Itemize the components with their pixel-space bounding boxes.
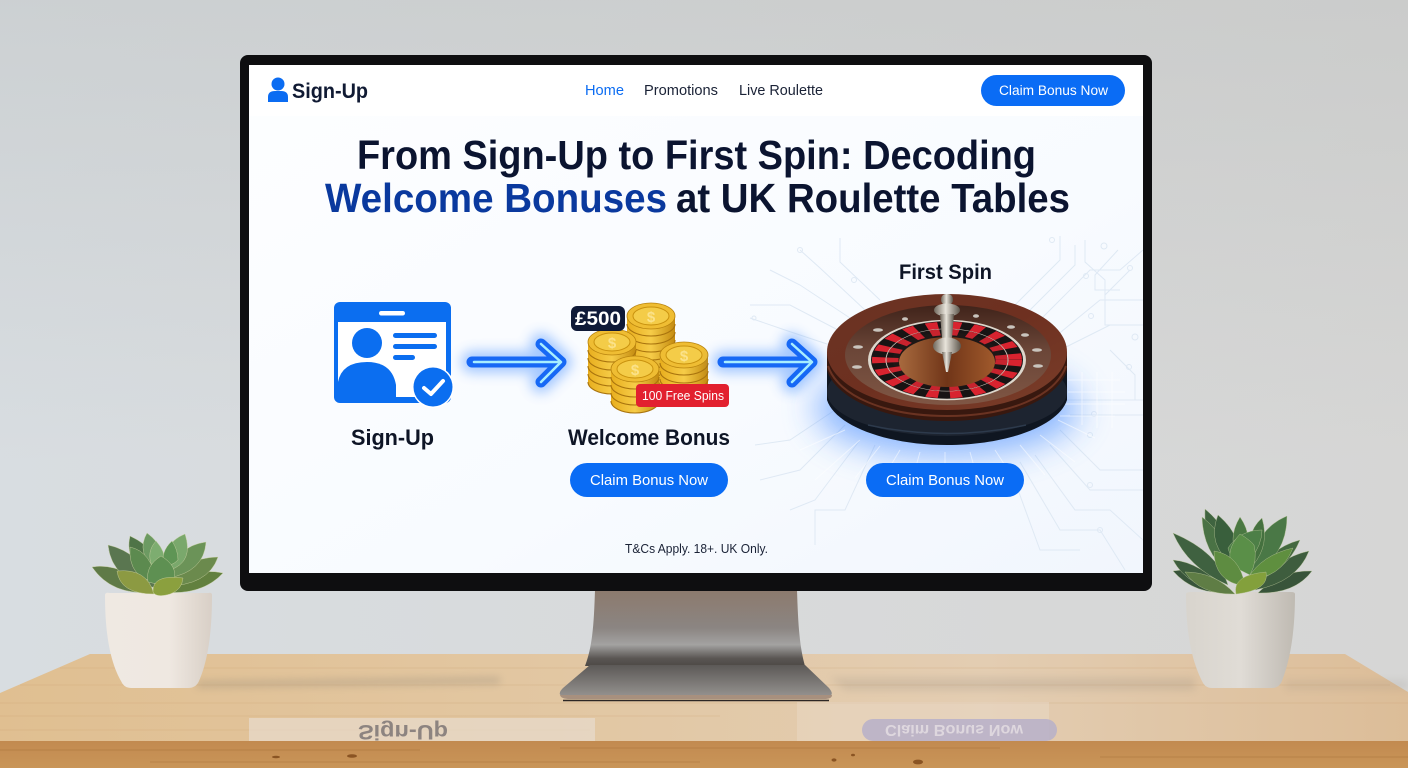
monitor stand (560, 590, 832, 700)
cast shadows (197, 677, 500, 688)
navigation bar (249, 65, 1143, 116)
label: sign-up: Sign-Up (351, 425, 434, 450)
icon: gold coins (588, 303, 708, 413)
button: claim bonus, first spin (866, 463, 1024, 497)
leaves (92, 533, 223, 596)
glow lines (811, 372, 1112, 472)
badge: 100 free spins: 100 Free Spins (642, 388, 724, 403)
title: From Sign-Up to First Spin: Decoding (357, 132, 1036, 178)
reflection on desk: Claim Bonus Now (885, 721, 1024, 738)
nav button: Claim Bonus Now (999, 83, 1108, 98)
reflection on desk (249, 702, 1057, 743)
nav links: Live Roulette (739, 83, 823, 99)
right potted succulent (1173, 509, 1312, 688)
circuit background (750, 236, 1143, 570)
screen (249, 65, 1143, 573)
arrow: sign-up to bonus (472, 344, 561, 382)
bowl (845, 305, 1051, 405)
spindle (933, 294, 961, 372)
nav button (981, 75, 1125, 106)
pot (105, 593, 212, 688)
check badge (412, 366, 454, 408)
leaves (1173, 509, 1312, 594)
logo (268, 78, 368, 103)
cone (899, 337, 995, 387)
label: welcome bonus: Welcome Bonus (568, 425, 730, 450)
badge: £500: £500 (575, 309, 621, 330)
monitor (240, 55, 1152, 591)
pot (1186, 592, 1295, 688)
title: at UK Roulette Tables (676, 175, 1070, 221)
left coin stack: $ (608, 335, 617, 352)
nav links: Promotions (644, 83, 718, 99)
roulette wheel (800, 294, 1125, 480)
wheel base (827, 368, 1067, 445)
reflection on desk: Sign-Up (358, 720, 448, 743)
disclaimer: T&Cs Apply. 18+. UK Only. (625, 542, 768, 556)
number ring (868, 320, 1026, 400)
icon: sign-up ID card (334, 302, 454, 408)
wheel rim (827, 294, 1067, 410)
front coin stack: $ (631, 362, 640, 379)
user icon (268, 78, 288, 102)
rim frets (852, 314, 1043, 369)
button: claim bonus, welcome (570, 463, 728, 497)
button: claim bonus, first spin: Claim Bonus Now (886, 472, 1004, 489)
title (325, 132, 1070, 221)
button: claim bonus, welcome: Claim Bonus Now (590, 472, 708, 489)
nav links (585, 83, 823, 99)
title: Welcome Bonuses (325, 175, 667, 221)
left potted succulent (92, 533, 223, 688)
label: first spin: First Spin (899, 260, 992, 284)
wooden desk (0, 654, 1408, 768)
badge: £500 (571, 306, 625, 331)
wheel body (827, 352, 1067, 421)
arrow: bonus to first spin (723, 344, 812, 382)
badge: 100 free spins (636, 384, 729, 407)
bezel (240, 55, 1152, 591)
back coin stack: $ (647, 309, 656, 326)
desk front edge (0, 741, 1408, 768)
nav links: Home (585, 83, 624, 99)
logo: Sign-Up (292, 80, 368, 103)
blue glow (815, 360, 1079, 456)
right coin stack: $ (680, 348, 689, 365)
